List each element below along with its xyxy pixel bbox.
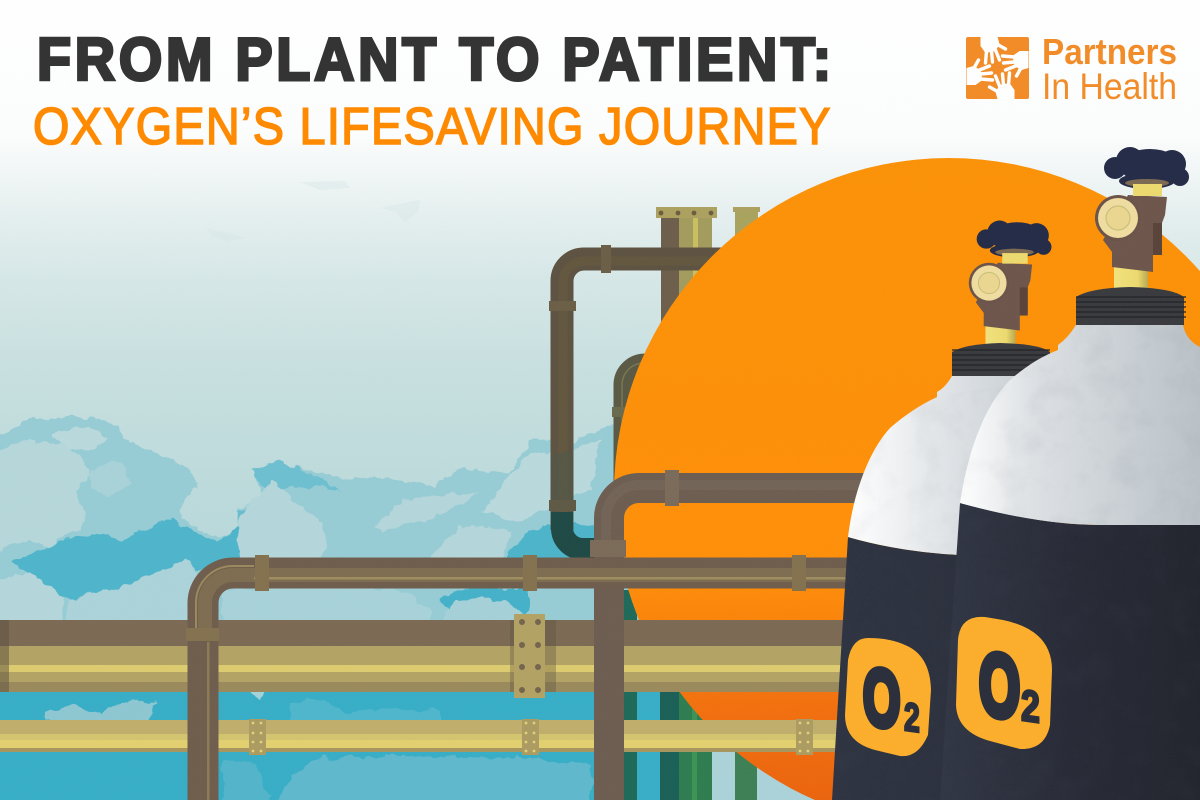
logo wordmark xyxy=(1042,31,1177,107)
logo wordmark: In Health xyxy=(1042,66,1177,107)
oxygen tank left xyxy=(830,221,1060,800)
front pipe upper xyxy=(590,470,875,800)
back pipe dark xyxy=(549,245,740,549)
oxygen tank right xyxy=(940,147,1200,800)
logo wordmark: Partners xyxy=(1042,31,1177,72)
orange sun circle xyxy=(614,158,1200,800)
O2 label left: 2 xyxy=(904,694,920,741)
title: FROM PLANT TO PATIENT: xyxy=(37,27,831,93)
front pipe lower xyxy=(186,555,860,800)
threaded neck right xyxy=(1076,287,1186,325)
title: OXYGEN’S LIFESAVING JOURNEY xyxy=(33,98,830,156)
faint high clouds xyxy=(205,181,420,241)
chimney large xyxy=(656,207,717,558)
O2 label left: O xyxy=(863,652,900,746)
flange with bolts xyxy=(514,614,545,698)
chimney small xyxy=(733,207,760,272)
logo mark: four hands xyxy=(966,37,1029,99)
O2 label right: O xyxy=(979,634,1020,738)
clouds xyxy=(0,410,660,800)
O2 label right xyxy=(956,617,1052,749)
back pipe olive xyxy=(612,363,660,500)
valve left xyxy=(969,221,1051,348)
large yellow pipe xyxy=(0,614,848,698)
thin yellow pipe xyxy=(0,719,840,755)
threaded neck left xyxy=(952,343,1050,376)
logo xyxy=(966,31,1177,107)
lower teal pipe sections xyxy=(624,590,757,800)
O2 label left xyxy=(845,638,931,756)
valve right xyxy=(1095,147,1189,292)
back pipes and chimneys xyxy=(549,207,760,800)
O2 label right: 2 xyxy=(1021,681,1040,733)
title xyxy=(33,27,831,156)
